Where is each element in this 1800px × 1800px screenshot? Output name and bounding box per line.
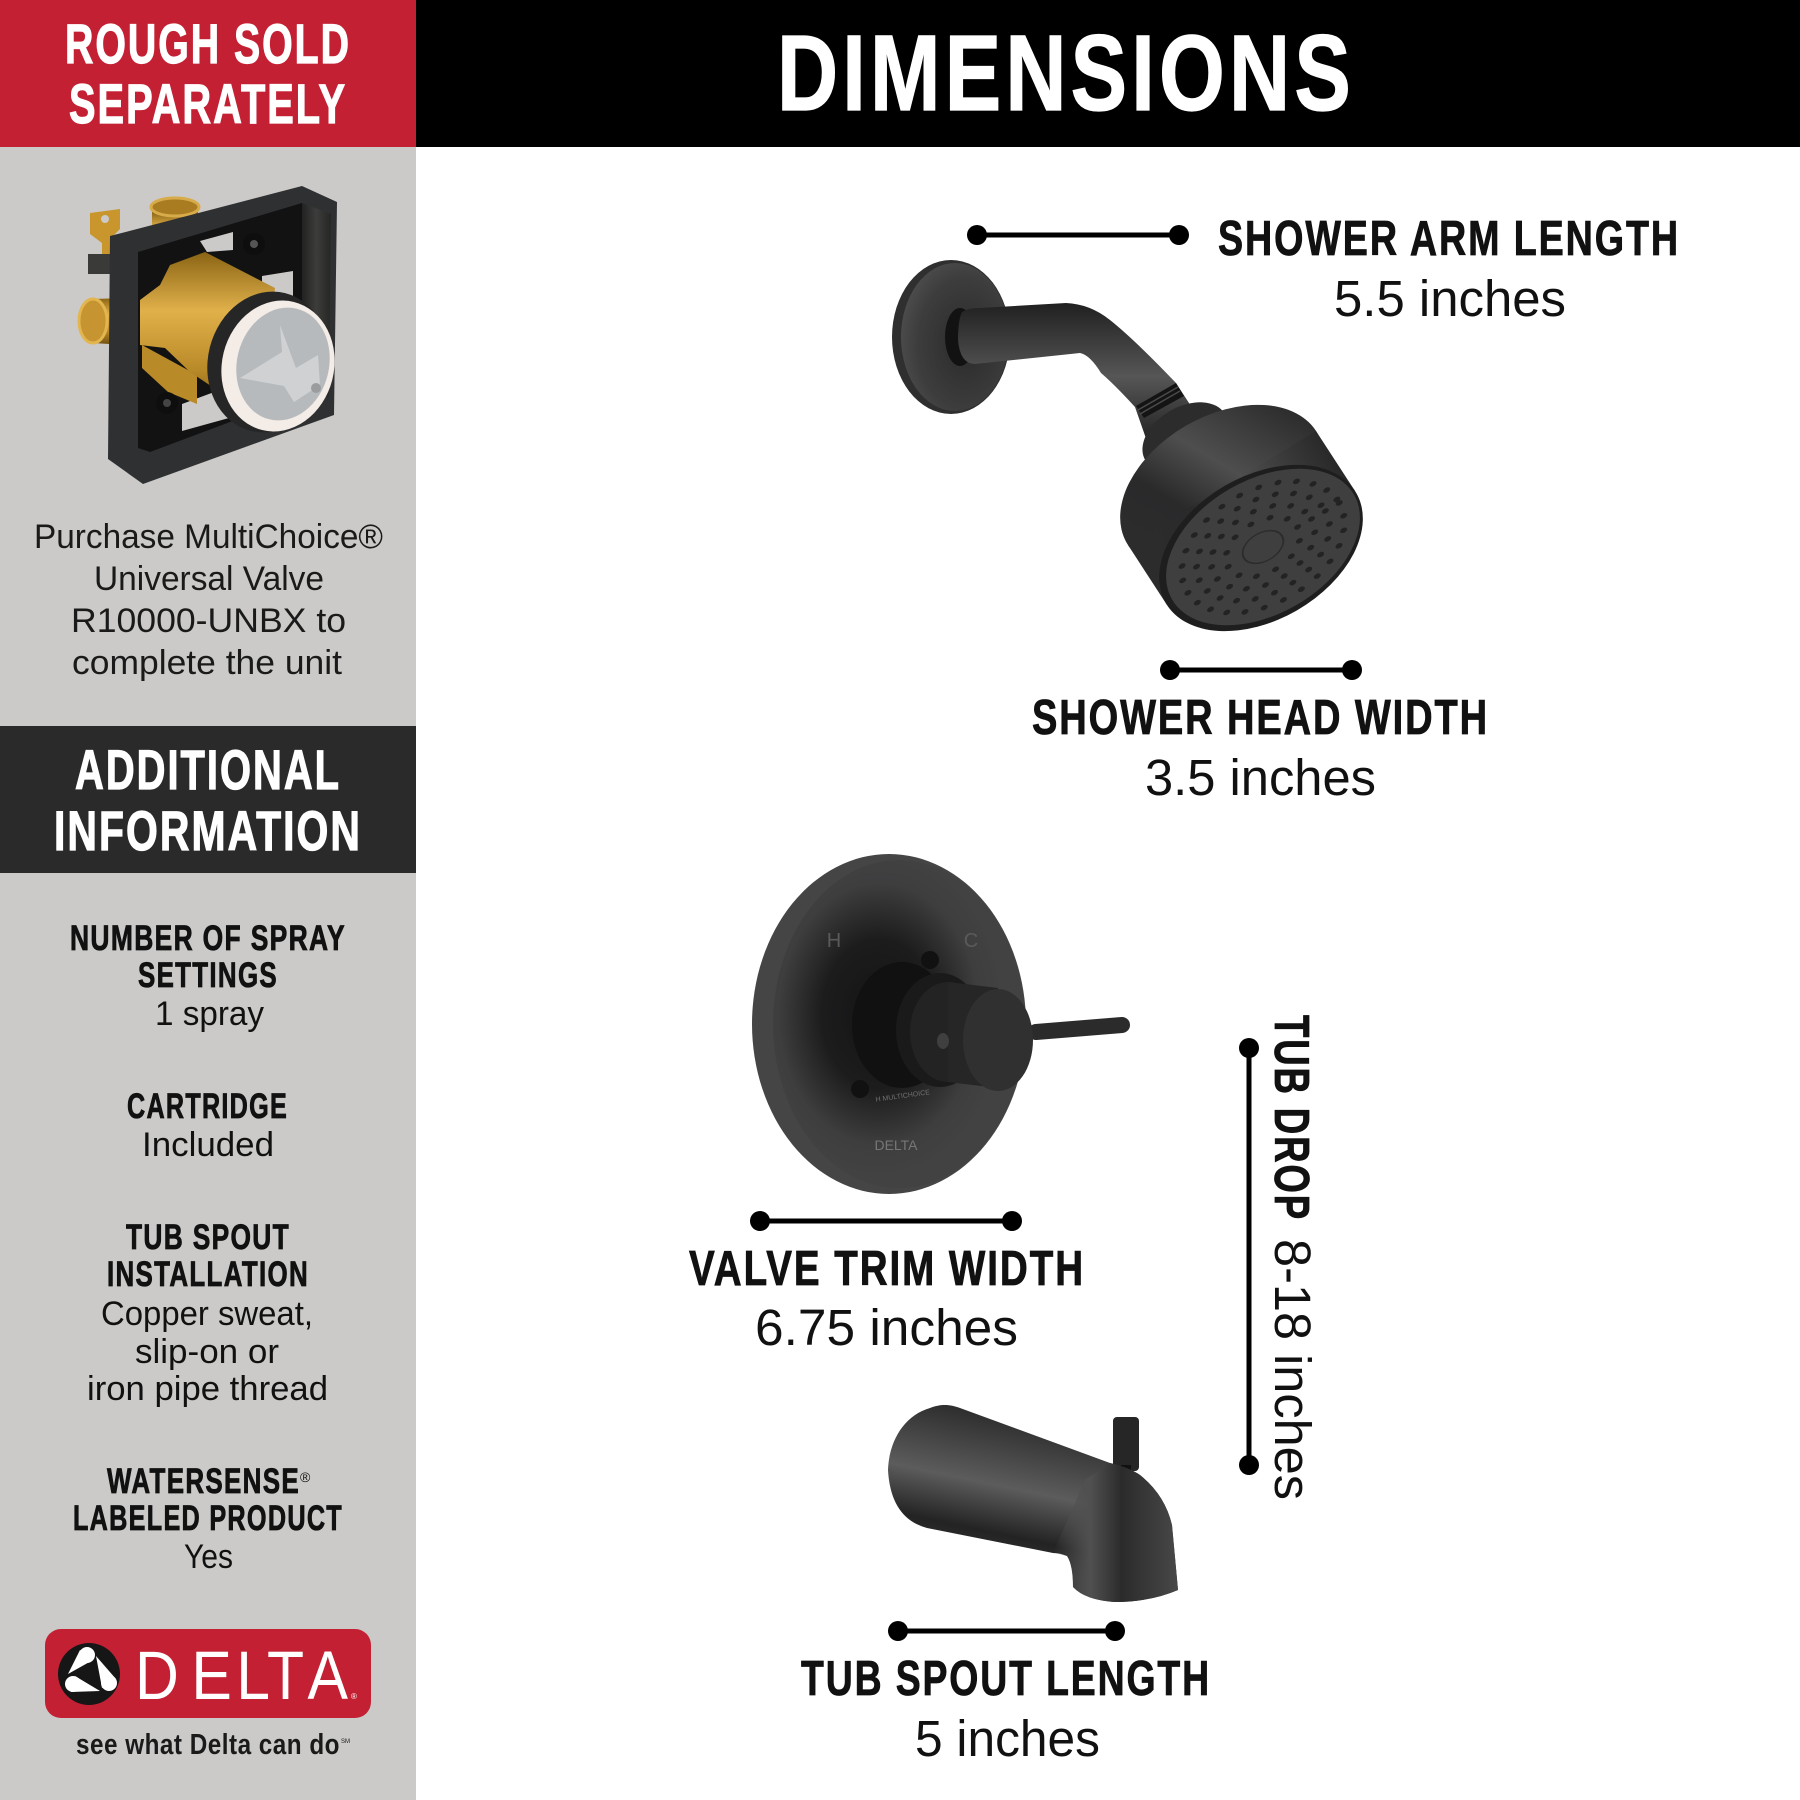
text block: number of spray settings: NUMBER OF SPRAY: [70, 919, 346, 958]
label: tub drop: 8-18 inches: [1264, 1239, 1321, 1500]
heading: additional information: ADDITIONAL: [75, 738, 341, 801]
text block: watersense labeled product: Yes: [184, 1538, 233, 1576]
dimension line: shower arm length: [967, 225, 1189, 245]
banner: rough sold separately: ROUGH SOLD: [65, 12, 351, 75]
text block: watersense labeled product: [73, 1462, 343, 1576]
text block: purchase note: Universal Valve: [94, 560, 324, 598]
text block: purchase note: [34, 518, 383, 682]
icon: valve trim: DELTA: [874, 1137, 918, 1153]
label: shower head width: [1032, 691, 1489, 806]
text block: number of spray settings: [70, 919, 346, 1033]
text block: tub spout installation: INSTALLATION: [107, 1255, 309, 1294]
text block: tub spout installation: slip-on or: [135, 1333, 279, 1371]
text block: tub spout installation: Copper sweat,: [101, 1295, 313, 1333]
text block: number of spray settings: SETTINGS: [138, 956, 278, 995]
dimension line: valve trim width: [750, 1211, 1022, 1231]
label: valve trim width: 6.75 inches: [755, 1299, 1018, 1356]
label: tub drop: TUB DROP: [1264, 1015, 1318, 1221]
logo: delta: see what Delta can do: [76, 1729, 340, 1761]
title: dimensions: DIMENSIONS: [777, 12, 1355, 133]
label: shower arm length: [1218, 212, 1680, 327]
icon: rough-in valve: [79, 186, 348, 484]
text block: purchase note: Purchase MultiChoice®: [34, 518, 383, 556]
icon: valve trim: C: [964, 930, 978, 952]
icon: valve trim: [752, 854, 1122, 1194]
banner: rough sold separately: SEPARATELY: [69, 72, 347, 135]
text block: watersense labeled product: ®: [300, 1469, 311, 1485]
icon: shower head and arm: [892, 260, 1392, 665]
title: dimensions: [416, 0, 1800, 147]
dimension line: shower head width: [1160, 660, 1362, 680]
dimension line: tub drop: [1239, 1038, 1259, 1475]
icon: valve trim: H MULTICHOICE: [875, 1089, 931, 1104]
label: shower head width: SHOWER HEAD WIDTH: [1032, 691, 1489, 745]
dimension line: tub spout length: [888, 1621, 1125, 1641]
logo: delta: [45, 1629, 371, 1761]
text block: cartridge: [127, 1087, 288, 1164]
label: valve trim width: VALVE TRIM WIDTH: [689, 1242, 1085, 1296]
label: tub spout length: TUB SPOUT LENGTH: [801, 1652, 1211, 1706]
text block: tub spout installation: iron pipe thread: [87, 1370, 328, 1408]
text block: watersense labeled product: LABELED PRODUCT: [73, 1499, 343, 1538]
icon: valve trim: H: [827, 930, 841, 952]
heading: additional information: [0, 726, 416, 873]
label: tub spout length: [801, 1652, 1211, 1767]
logo: delta: DELTA: [135, 1636, 349, 1714]
label: tub spout length: 5 inches: [915, 1710, 1100, 1767]
text block: cartridge: Included: [142, 1126, 274, 1164]
banner: rough sold separately: [0, 0, 416, 147]
text block: tub spout installation: TUB SPOUT: [126, 1218, 290, 1257]
text block: purchase note: complete the unit: [72, 644, 343, 682]
text block: number of spray settings: 1 spray: [155, 995, 264, 1033]
label: shower head width: 3.5 inches: [1145, 749, 1376, 806]
text block: cartridge: CARTRIDGE: [127, 1087, 288, 1126]
text block: purchase note: R10000-UNBX to: [71, 602, 346, 640]
text block: watersense labeled product: WATERSENSE: [107, 1462, 300, 1501]
label: tub drop: [1264, 1015, 1321, 1500]
text block: tub spout installation: [87, 1218, 328, 1408]
label: valve trim width: [689, 1242, 1085, 1356]
icon: tub spout: [888, 1405, 1178, 1602]
heading: additional information: INFORMATION: [54, 799, 362, 862]
logo: delta: ®: [351, 1692, 357, 1701]
panel: sidebar: [0, 147, 416, 1800]
logo: delta: SM: [341, 1739, 350, 1745]
label: shower arm length: 5.5 inches: [1334, 270, 1566, 327]
